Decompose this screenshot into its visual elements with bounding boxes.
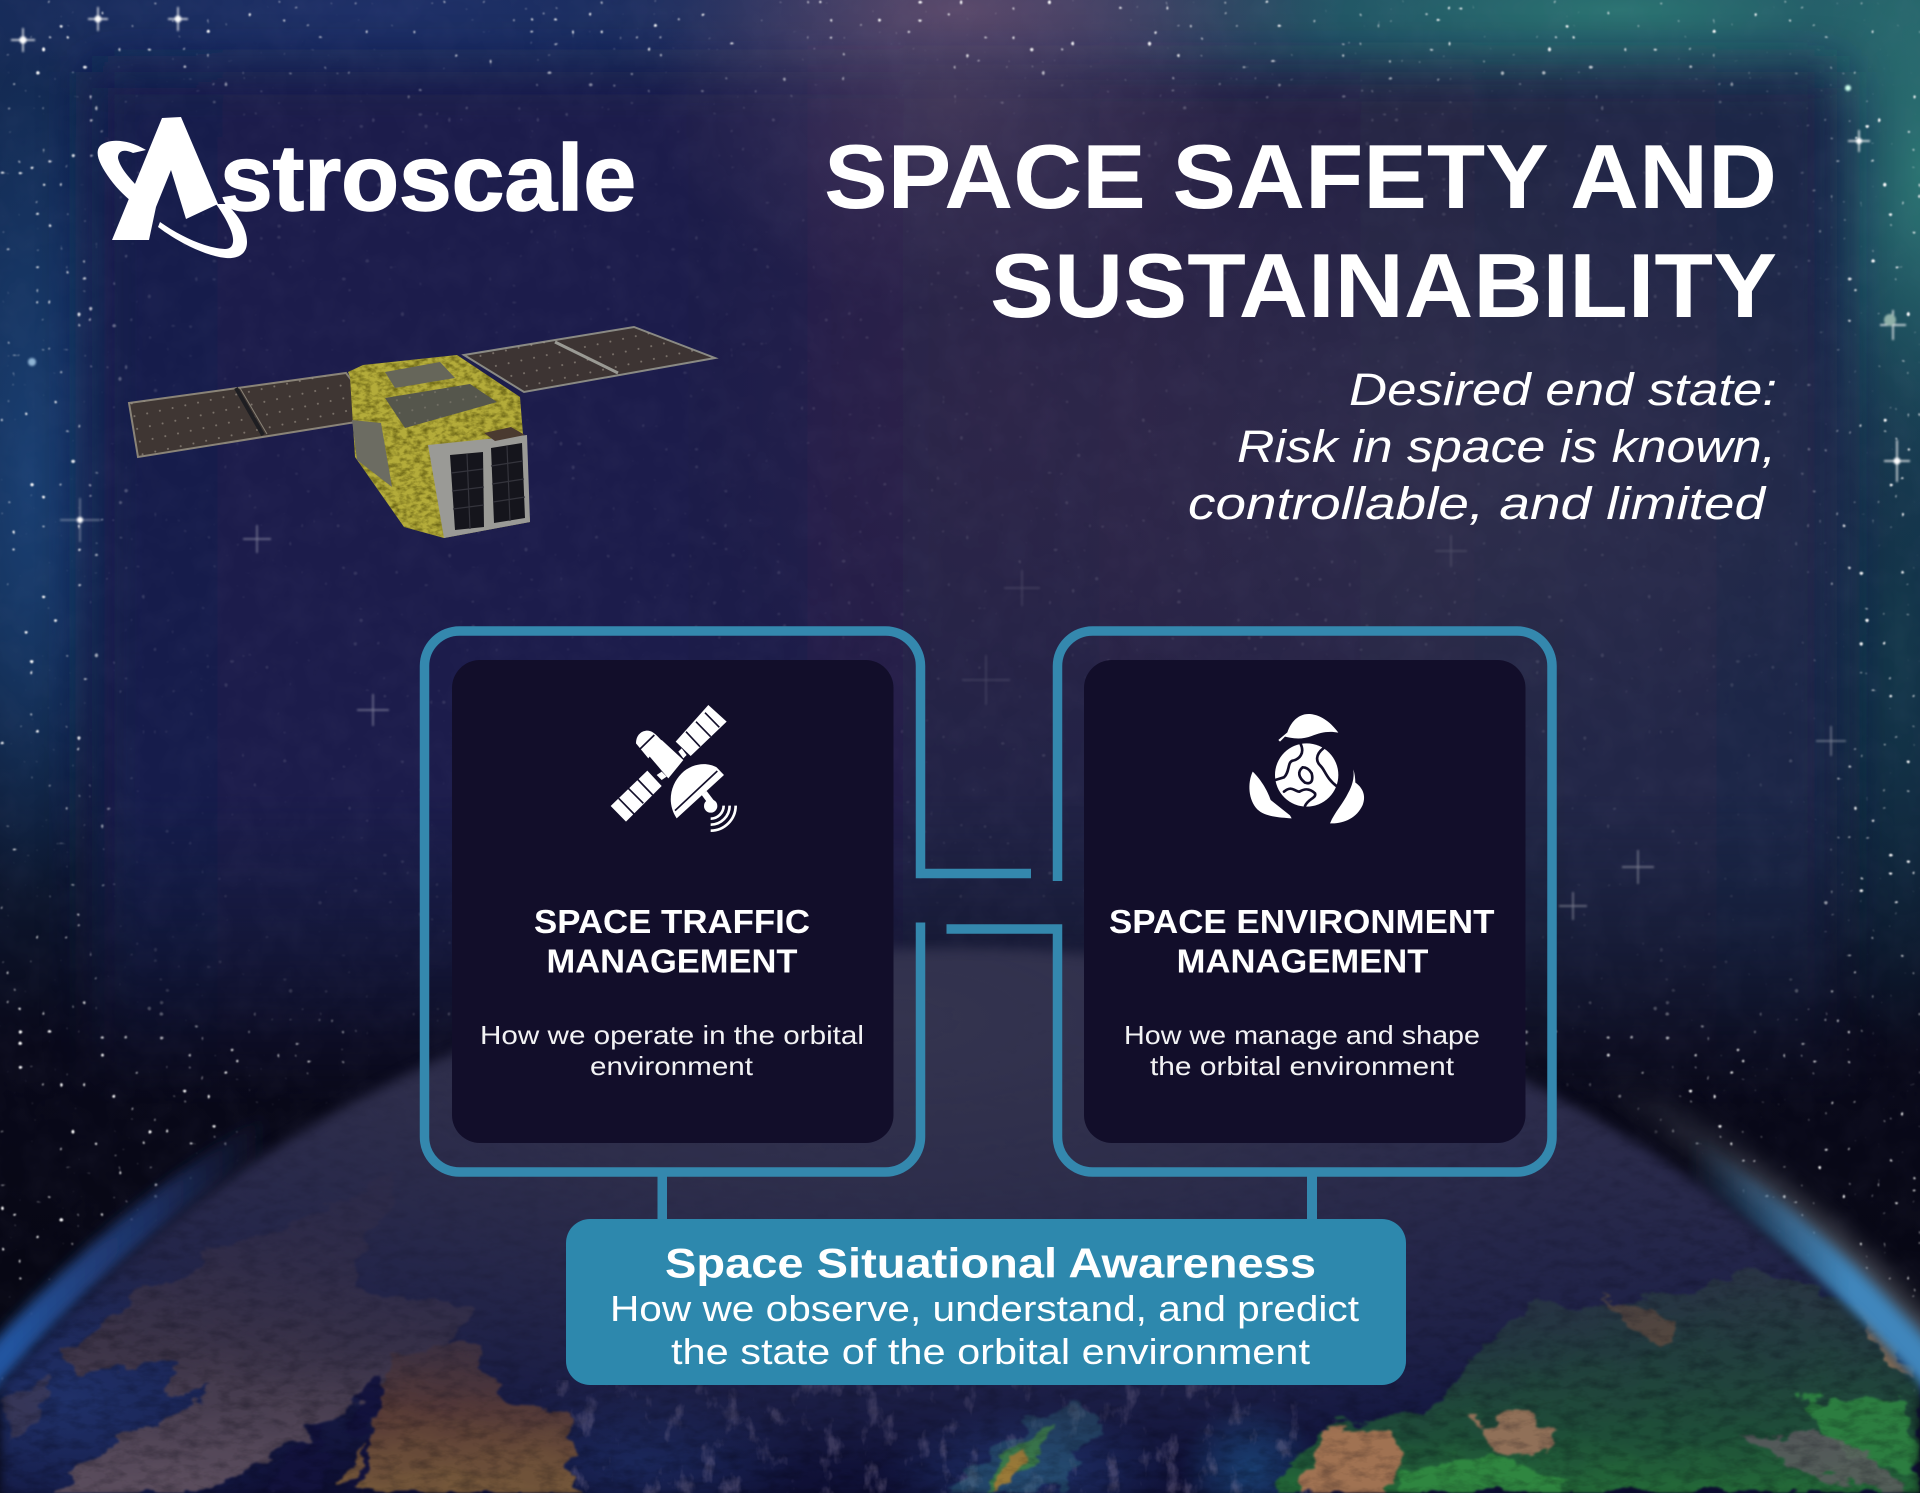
earth globe: [0, 940, 1920, 1493]
subtitle: desired end state: [1188, 364, 1777, 529]
front panel: [428, 427, 530, 538]
solar array right: [464, 327, 715, 392]
subtitle: desired end state: Desired end state:: [1349, 364, 1777, 415]
connector stems to situational awareness: [658, 1176, 1317, 1221]
solar array left: [129, 373, 381, 457]
panel: space traffic management: [424, 631, 1031, 1172]
description: environment: [590, 1051, 754, 1081]
logo: Astroscale: [98, 117, 636, 258]
outline frame with connector: [424, 631, 1031, 1172]
description: How we manage and shape: [1124, 1020, 1480, 1050]
description: [610, 1288, 1359, 1372]
heading: [534, 903, 810, 980]
card: [1084, 660, 1526, 1143]
description: How we operate in the orbital: [480, 1020, 864, 1050]
panel: space situational awareness: [566, 1219, 1406, 1385]
description: How we observe, understand, and predict: [610, 1288, 1359, 1329]
icon: satellite: [611, 705, 736, 831]
sparkle stars: [11, 7, 1910, 920]
outline frame with connector: [946, 631, 1552, 1172]
description: the orbital environment: [1150, 1051, 1455, 1081]
logo wordmark: stroscale: [220, 125, 636, 230]
gold foil body: [348, 355, 530, 538]
description: the state of the orbital environment: [671, 1331, 1310, 1372]
logo mark: A with orbit: [98, 117, 247, 258]
earth atmosphere rim: [0, 1078, 1920, 1408]
title: SUSTAINABILITY: [990, 236, 1777, 337]
panel: space environment management: [946, 631, 1552, 1172]
heading: MANAGEMENT: [546, 942, 798, 980]
spacecraft illustration: [129, 327, 715, 538]
icon: globe and leaves: [1249, 714, 1364, 823]
heading: [1109, 903, 1494, 980]
heading: SPACE ENVIRONMENT: [1109, 903, 1494, 940]
card: [452, 660, 894, 1143]
subtitle: desired end state: controllable, and limited: [1188, 478, 1767, 529]
heading: MANAGEMENT: [1177, 942, 1428, 980]
title: SPACE SAFETY AND: [824, 127, 1777, 228]
heading: SPACE TRAFFIC: [534, 903, 810, 940]
description: [1124, 1020, 1480, 1081]
heading: Space Situational Awareness: [665, 1240, 1316, 1286]
title: [824, 127, 1777, 337]
subtitle: desired end state: Risk in space is known,: [1237, 421, 1776, 472]
description: [480, 1020, 864, 1081]
